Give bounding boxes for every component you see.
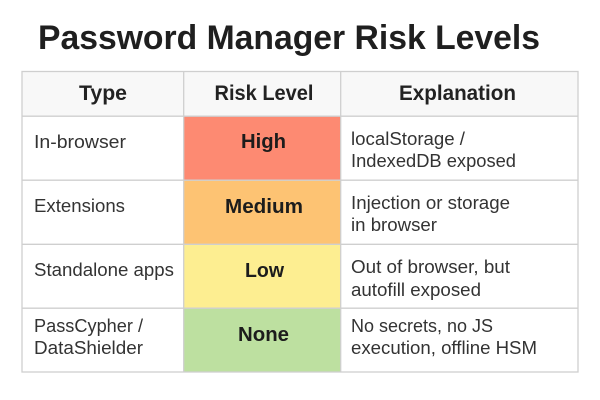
row 3 explanation: autofill exposed [351,280,481,300]
row 3 type: Standalone apps [34,260,174,280]
header row background [22,71,578,116]
row 2 explanation: in browser [351,215,437,235]
row 3 explanation [351,257,510,300]
risk cell: low [184,244,341,308]
row 4 explanation [351,316,537,358]
title: Password Manager Risk Levels [38,19,540,57]
header: type: Type [79,82,127,105]
row 1 explanation [351,129,516,171]
row 4 risk: None [238,324,289,346]
row 2 type: Extensions [34,196,125,216]
row 3 risk: Low [245,260,284,282]
row 4 explanation: No secrets, no JS [351,316,493,336]
risk cell: none [184,308,341,372]
row 1 explanation: localStorage / [351,129,465,149]
row 1 type: In-browser [34,132,126,152]
row 4 type: DataShielder [34,338,143,358]
row 4 explanation: execution, offline HSM [351,338,537,358]
row 4 type [34,316,143,358]
row 1 explanation: IndexedDB exposed [351,151,516,171]
row 2 risk: Medium [225,196,303,218]
row 4 type: PassCypher / [34,316,143,336]
header: risk level: Risk Level [214,82,314,105]
header: explanation: Explanation [399,82,516,105]
row 1 risk: High [241,131,286,153]
table [22,71,578,372]
row 2 explanation [351,193,510,235]
row 3 explanation: Out of browser, but [351,257,510,277]
risk cell: high [184,116,341,180]
risk cell: medium [184,180,341,244]
row 2 explanation: Injection or storage [351,193,510,213]
